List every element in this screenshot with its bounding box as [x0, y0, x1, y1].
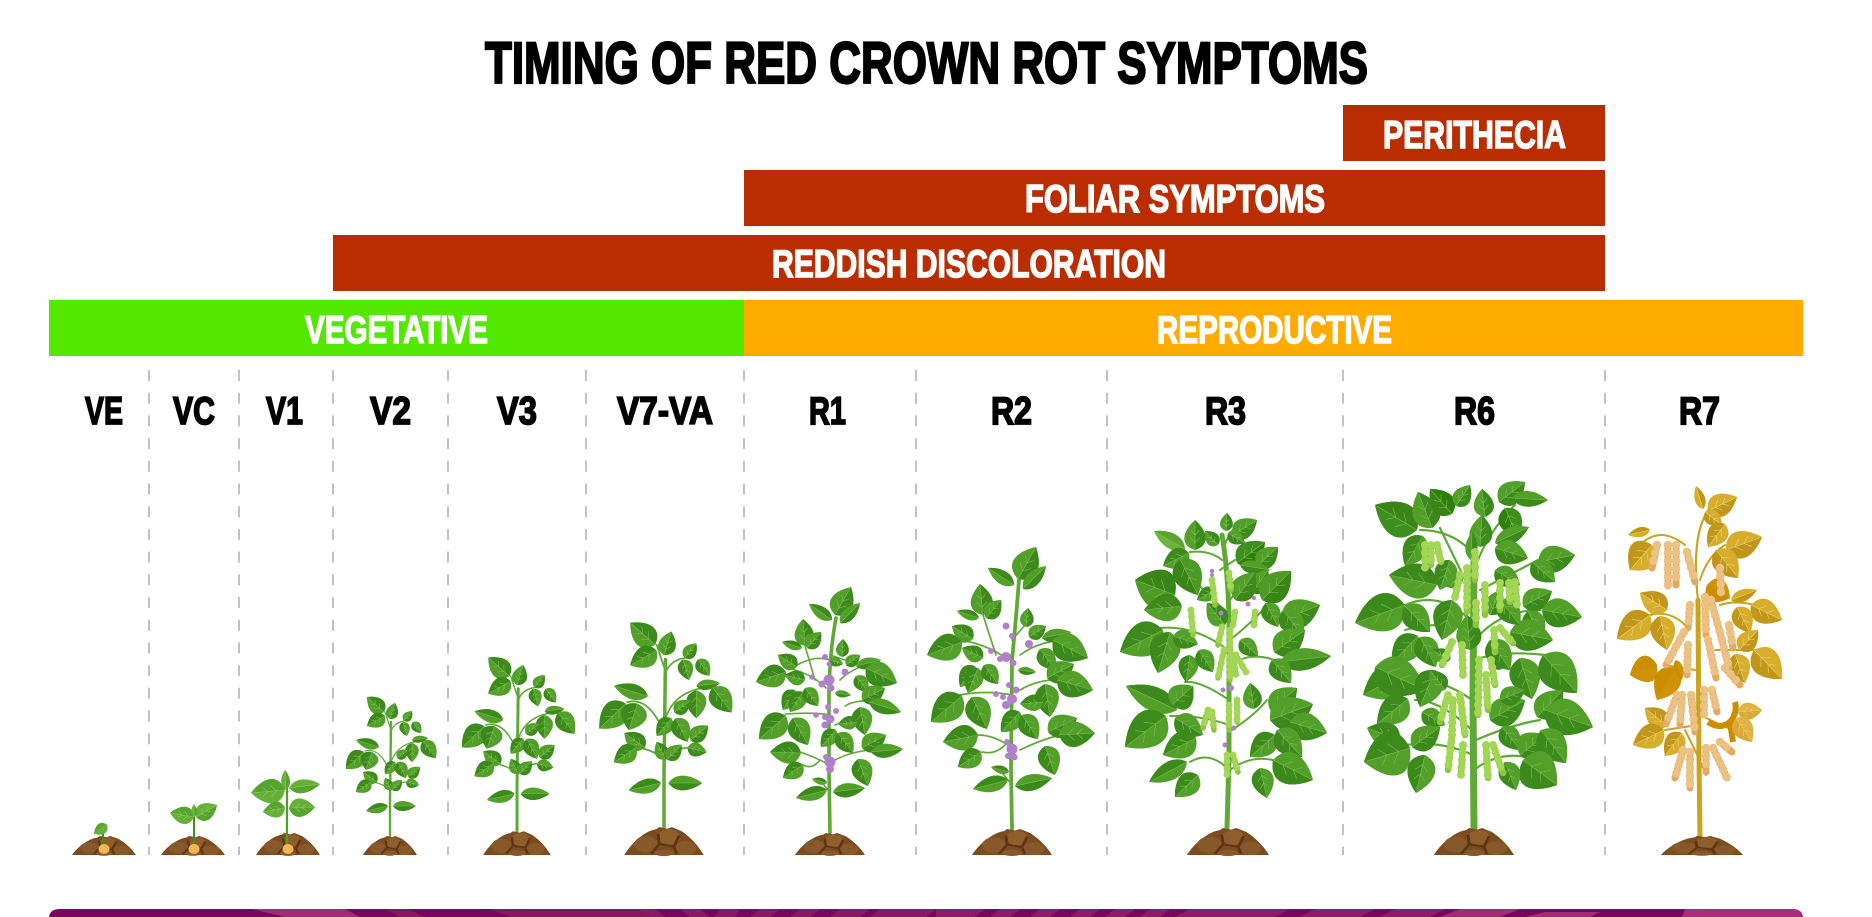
R1 flowers: [809, 654, 848, 773]
bar: reproductive: [744, 300, 1803, 356]
R2 flowers: [988, 622, 1033, 760]
bar: reddish discoloration: [333, 235, 1605, 291]
bar: vegetative: [49, 300, 744, 356]
bar: perithecia: [1343, 105, 1605, 161]
stage labels: V2: [370, 390, 411, 433]
plant: VC: [161, 798, 225, 856]
plant: V3: [454, 650, 582, 856]
R7 withered leaves: [1625, 574, 1736, 742]
plant: V7-VA: [590, 614, 741, 856]
bar: vegetative: VEGETATIVE: [305, 309, 488, 352]
bar: perithecia: PERITHECIA: [1383, 114, 1566, 157]
plant: R6: [1349, 473, 1599, 856]
stage labels: V7-VA: [617, 390, 713, 433]
plant: R7: [1608, 484, 1792, 856]
stage labels: R1: [809, 390, 846, 433]
stage labels: R3: [1205, 390, 1246, 433]
bar: foliar symptoms: [744, 170, 1605, 226]
bar: reproductive: REPRODUCTIVE: [1157, 309, 1392, 352]
stage labels: R7: [1679, 390, 1720, 433]
plant: VE: [72, 820, 136, 856]
bar: reddish discoloration: REDDISH DISCOLORATION: [772, 243, 1166, 286]
bar: foliar symptoms: FOLIAR SYMPTOMS: [1025, 178, 1325, 221]
R7 pods: [1652, 545, 1740, 788]
stage labels: VC: [173, 390, 215, 433]
R3 pods: [1191, 573, 1255, 775]
stage labels: R2: [991, 390, 1032, 433]
stage labels: VE: [85, 390, 123, 433]
plant: V2: [340, 691, 442, 856]
stage labels: [85, 390, 1720, 433]
R3 flowers: [1210, 569, 1256, 748]
plant: R2: [922, 541, 1097, 856]
stage labels: V3: [497, 390, 537, 433]
title: TIMING OF RED CROWN ROT SYMPTOMS: [485, 31, 1368, 96]
plant: V1: [250, 770, 321, 856]
stage labels: R6: [1454, 390, 1495, 433]
plant: R3: [1112, 511, 1332, 856]
stage labels: V1: [266, 390, 303, 433]
R6 pods: [1425, 545, 1517, 778]
plant: R1: [751, 581, 904, 856]
footer band: [49, 909, 1803, 917]
